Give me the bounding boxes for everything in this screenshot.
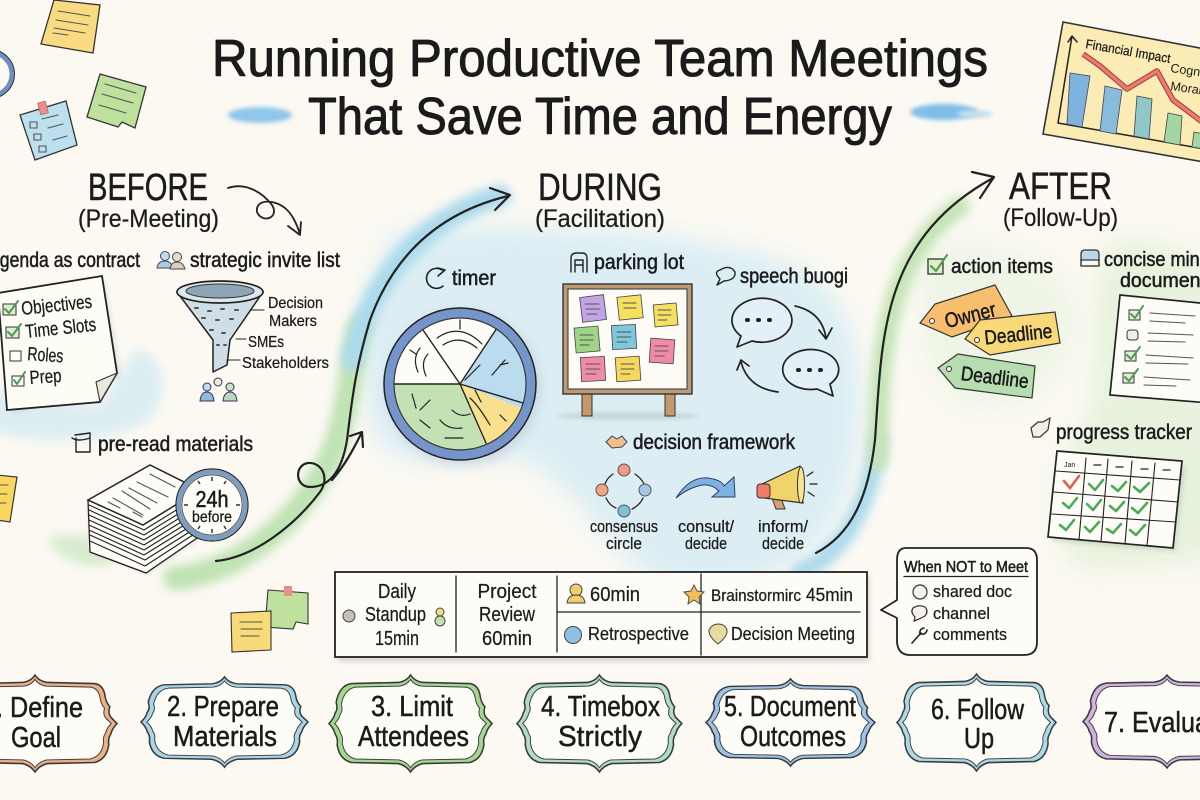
cell: brainstorming: 45min <box>806 585 853 605</box>
checklist note with clip <box>20 101 77 160</box>
speech bubbles <box>732 298 839 396</box>
arrow: looped down <box>228 186 301 235</box>
icon: consensus circle <box>596 464 651 517</box>
step 5: Outcomes <box>740 721 846 753</box>
checklist: Roles <box>27 344 64 367</box>
heading: after: (Follow-Up) <box>1003 204 1118 232</box>
cell: project review <box>478 581 537 650</box>
bars <box>1067 73 1200 150</box>
heading: before: (Pre-Meeting) <box>78 205 219 233</box>
funnel labels <box>242 295 329 372</box>
cell: 60min: 60min <box>590 584 640 606</box>
section: before <box>0 167 340 574</box>
agenda note <box>0 276 122 416</box>
label: strategic invite list: strategic invite list <box>190 249 340 272</box>
step 1: Goal <box>11 722 61 754</box>
clock: 24h before: before <box>192 509 232 526</box>
progress calendar: Jan <box>1064 462 1075 469</box>
filtered people <box>200 378 237 401</box>
funnel labels: SMEs <box>248 334 284 351</box>
framework labels: inform/ <box>758 518 808 536</box>
label: decision framework: decision framework <box>633 431 795 454</box>
checklist: Objectives <box>20 292 93 320</box>
step 5: 5. Document <box>724 691 856 723</box>
heading: before <box>78 167 219 233</box>
heading: during: DURING <box>538 167 662 209</box>
sticky: green <box>87 74 146 128</box>
arrow: during to after <box>816 172 994 553</box>
icon: megaphone <box>757 466 817 509</box>
sticky: yellow <box>41 0 100 53</box>
clock: 24h before: 24h <box>196 486 228 512</box>
wedge: blue <box>460 328 527 409</box>
chart: impact, top right <box>1043 22 1200 163</box>
step 2 <box>141 677 308 767</box>
title <box>212 30 988 146</box>
checklist <box>3 292 97 389</box>
paper stack <box>88 465 200 574</box>
framework labels: consensus <box>590 518 658 536</box>
step 3: Attendees <box>358 721 469 753</box>
framework labels <box>590 518 808 553</box>
label: timer: timer <box>452 267 496 290</box>
trend line <box>1083 54 1200 124</box>
step 6 <box>897 674 1056 771</box>
document checklist <box>1110 295 1200 403</box>
step 2: Materials <box>173 721 277 753</box>
step 3 <box>329 675 492 772</box>
sticky: yellow <box>231 611 271 652</box>
framework labels: circle <box>606 535 642 553</box>
step 3: 3. Limit <box>371 691 453 723</box>
step 4: Strictly <box>558 721 642 753</box>
label: pre-read materials: pre-read materials <box>98 433 253 456</box>
tag: deadline yellow: Deadline <box>983 321 1053 350</box>
cell: project review: Review <box>479 604 535 626</box>
title: That Save Time and Energy <box>308 88 892 146</box>
item: comments: comments <box>933 625 1007 644</box>
heading: after <box>1003 166 1118 232</box>
item: channel: channel <box>933 604 990 623</box>
title brush accents <box>228 104 993 123</box>
heading: after: AFTER <box>1009 166 1112 208</box>
title: Running Productive Team Meetings <box>212 30 988 88</box>
label: speech bubble: speech buogi <box>740 265 848 288</box>
small sticky notes by table <box>231 586 308 652</box>
framework labels: decide <box>685 535 727 553</box>
item: shared doc: shared doc <box>933 582 1012 601</box>
parking lot board <box>555 284 699 420</box>
funnel labels: Stakeholders <box>242 355 329 372</box>
cell: daily standup: Standup <box>365 604 426 626</box>
board notes <box>574 295 678 382</box>
section: during <box>384 167 848 553</box>
label: concise minutes document <box>1081 249 1200 292</box>
chart: impact, top right: Financial Impact <box>1084 36 1172 66</box>
step 4 <box>517 675 682 772</box>
tag: deadline green <box>938 354 1035 398</box>
wedge: yellow <box>460 384 523 447</box>
cell: daily standup: 15min <box>375 628 419 650</box>
label: timer <box>427 267 496 290</box>
clock at left edge <box>0 50 14 98</box>
heading: before: BEFORE <box>88 167 208 209</box>
progress calendar <box>1048 451 1186 552</box>
steps row <box>0 674 1200 772</box>
step 6: Up <box>964 723 994 755</box>
framework labels: decide <box>762 535 804 553</box>
cell: decision meeting: Decision Meeting <box>731 624 855 644</box>
step 6: 6. Follow <box>931 694 1025 726</box>
cell: project review: 60min <box>482 628 532 650</box>
step 7 <box>1083 675 1200 768</box>
funnel labels: Decision <box>268 295 323 312</box>
callout: when not to meet: When NOT to Meet <box>904 559 1029 576</box>
step 5 <box>706 679 875 766</box>
clock: 24h before <box>176 469 248 541</box>
arrow: before to during <box>216 188 510 561</box>
cell: daily standup <box>343 581 445 650</box>
cell: brainstorming <box>684 585 853 605</box>
cell: retrospective: Retrospective <box>588 624 689 644</box>
sticky: green pinned <box>265 586 308 629</box>
framework labels: consult/ <box>678 518 734 536</box>
heading: during <box>535 167 665 233</box>
cell: 60min <box>567 584 640 606</box>
step 4: 4. Timebox <box>541 691 660 723</box>
funnel <box>177 281 329 401</box>
callout: when not to meet <box>881 548 1037 655</box>
step 1 <box>0 675 117 772</box>
funnel labels: Makers <box>269 313 317 330</box>
timer wheel <box>384 308 541 466</box>
tag: deadline green: Deadline <box>960 363 1030 393</box>
cell: project review: Project <box>478 581 537 603</box>
cell: daily standup: Daily <box>378 581 416 603</box>
sticky: yellow left edge <box>0 475 17 522</box>
wedge: green <box>392 384 486 452</box>
decorative sticky notes top left <box>0 0 146 160</box>
tag: owner: Owner <box>942 298 998 333</box>
heading: during: (Facilitation) <box>535 205 665 233</box>
meeting types table <box>335 572 870 662</box>
icon: curved arrow <box>676 477 735 498</box>
watercolor washes <box>0 196 1200 590</box>
label: action items: action items <box>951 255 1053 278</box>
checklist: Time Slots <box>24 315 97 343</box>
section: after <box>920 166 1200 552</box>
cell: brainstorming: Brainstormirc <box>711 587 801 605</box>
tag: owner <box>920 285 1012 337</box>
tag: deadline yellow <box>965 312 1060 355</box>
label: parking lot: parking lot <box>594 251 684 274</box>
checklist: Prep <box>29 366 62 389</box>
step 2: 2. Prepare <box>167 691 279 723</box>
